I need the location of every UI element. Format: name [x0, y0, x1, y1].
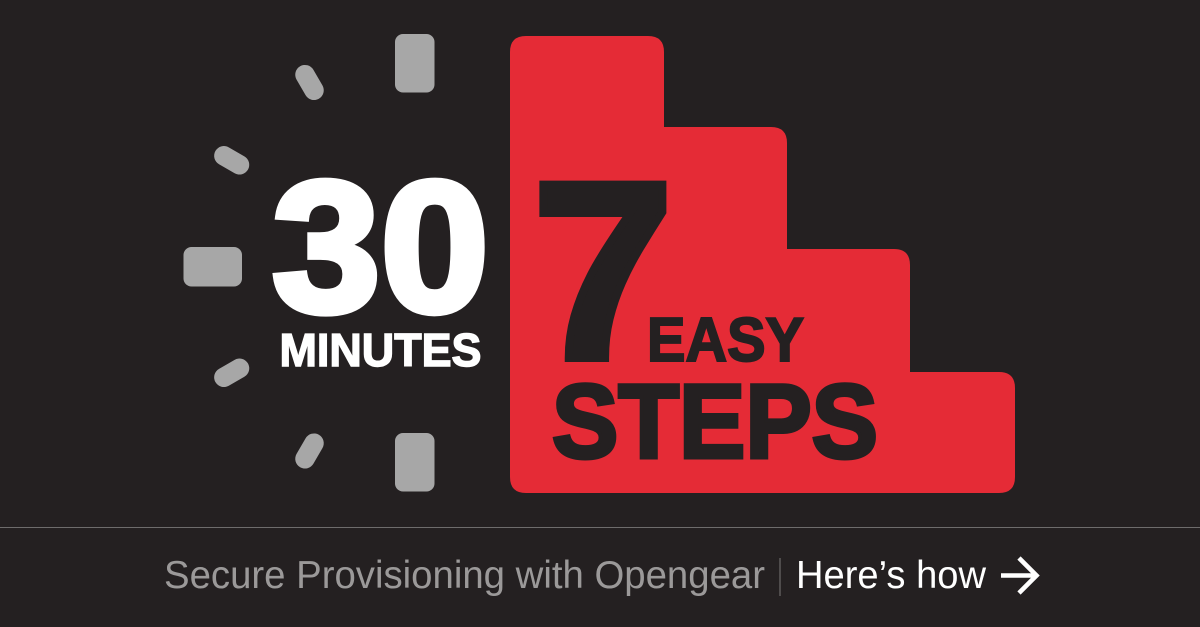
tick: lower left outer	[305, 443, 314, 459]
tick: left	[184, 247, 242, 286]
number: 7: 7	[532, 131, 674, 412]
label: STEPS: STEPS	[552, 364, 878, 480]
footer link: here's how: Here’s how	[796, 554, 987, 597]
tick: upper left inner	[224, 156, 240, 165]
number: 30: 30	[272, 144, 489, 351]
tick: lower left inner	[224, 368, 240, 377]
icon: right arrow	[1001, 558, 1036, 593]
tick: top	[395, 34, 434, 92]
tick: upper left outer	[305, 75, 314, 90]
tick: bottom	[395, 433, 434, 492]
red staircase panel	[510, 36, 1015, 493]
footer separator pipe	[780, 558, 781, 596]
label: EASY: EASY	[647, 306, 804, 375]
stopwatch tick marks	[184, 34, 434, 492]
label: MINUTES: MINUTES	[280, 324, 482, 376]
footer text: secure provisioning: Secure Provisioning with Opengear	[164, 554, 765, 597]
footer divider	[0, 527, 1200, 528]
